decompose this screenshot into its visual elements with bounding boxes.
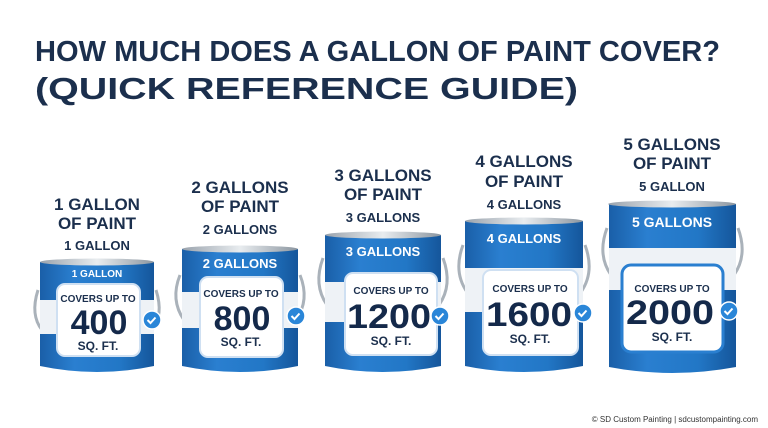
panel 3: 1200 [347,298,431,336]
can 1: 1 gallon [35,195,161,372]
label 4 [475,152,573,212]
label 1 [54,195,140,253]
label 2: 2 GALLONS [203,222,278,237]
panel 5 [622,265,723,352]
label 4: OF PAINT [485,172,564,191]
check 4 [574,304,592,322]
panel 4: 1600 [486,296,572,334]
label 1: OF PAINT [58,214,137,233]
footer credit: © SD Custom Painting | sdcustompainting.com [592,415,758,424]
can 1: 1 gallon: 1 GALLON [72,269,122,280]
can 2: 2 gallons: 2 GALLONS [203,256,278,271]
can 2: 2 gallons [176,178,305,372]
label 3: OF PAINT [344,185,423,204]
check 2 [287,307,305,325]
panel 2: 800 [214,300,270,338]
label 2 [191,178,289,237]
panel 5: 2000 [626,294,714,332]
can 4: 4 gallons [459,152,592,372]
label 3: 3 GALLONS [346,210,421,225]
panel 5: COVERS UP TO [634,284,710,295]
label 2: OF PAINT [201,197,280,216]
label 4: 4 GALLONS [487,197,562,212]
label 5: 5 GALLON [639,179,705,194]
panel 2 [200,277,283,357]
panel 5: SQ. FT. [652,330,692,344]
label 4: 4 GALLONS [475,152,573,171]
check 3 [431,307,449,325]
check 5 [720,302,738,320]
label 2: 2 GALLONS [191,178,289,197]
panel 1 [57,284,140,356]
panel 2: COVERS UP TO [203,289,279,300]
panel 3 [345,273,437,355]
label 5 [623,135,721,194]
can 5: 5 gallons [603,135,742,373]
title [35,36,720,106]
panel 4: SQ. FT. [510,332,550,346]
panel 3: COVERS UP TO [353,286,429,297]
panel 1: SQ. FT. [78,339,118,353]
title: HOW MUCH DOES A GALLON OF PAINT COVER? [35,36,720,68]
panel 4: COVERS UP TO [492,284,568,295]
panel 1: COVERS UP TO [60,294,136,305]
can 5: 5 gallons: 5 GALLONS [632,214,712,230]
label 3: 3 GALLONS [334,166,432,185]
label 5: 5 GALLONS [623,135,721,154]
can 3: 3 gallons: 3 GALLONS [346,244,421,259]
label 3 [334,166,432,225]
panel 4 [483,270,578,355]
can 3: 3 gallons [319,166,449,372]
title: (QUICK REFERENCE GUIDE) [35,71,578,106]
label 1: 1 GALLON [54,195,140,214]
can 4: 4 gallons: 4 GALLONS [487,231,562,246]
label 5: OF PAINT [633,154,712,173]
check 1 [143,311,161,329]
panel 3: SQ. FT. [371,334,411,348]
label 1: 1 GALLON [64,238,130,253]
panel 1: 400 [71,304,127,342]
panel 2: SQ. FT. [221,335,261,349]
